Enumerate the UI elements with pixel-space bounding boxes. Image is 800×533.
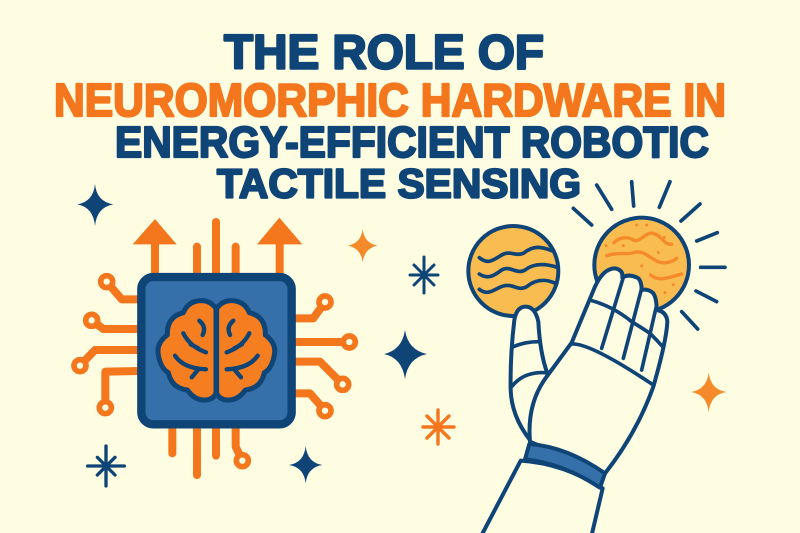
chip illustration xyxy=(74,184,378,486)
left hemisphere xyxy=(158,301,216,400)
upward arrows xyxy=(133,218,302,275)
palm and fingers xyxy=(530,268,667,473)
right hemisphere xyxy=(217,301,275,400)
brain icon xyxy=(158,301,275,400)
title line 4: TACTILE SENSING xyxy=(217,160,581,206)
chip body xyxy=(141,277,292,424)
finger joints xyxy=(572,277,663,385)
thumb joints xyxy=(512,342,545,387)
energy rays xyxy=(573,182,725,329)
title line 1: THE ROLE OF xyxy=(224,26,544,80)
title line 2: NEUROMORPHIC HARDWARE IN xyxy=(54,74,726,126)
wristband xyxy=(525,444,605,488)
robotic hand illustration xyxy=(468,182,726,533)
forearm xyxy=(482,461,603,533)
trace terminals xyxy=(74,276,355,467)
asterisk: navy centre xyxy=(410,257,438,293)
sparkle: orange xyxy=(348,229,378,262)
asterisk: navy bottom left xyxy=(88,446,124,486)
right sensing sphere xyxy=(594,218,689,312)
title xyxy=(54,26,726,206)
sparkle: orange right xyxy=(691,372,726,412)
asterisk: orange centre xyxy=(423,410,454,444)
left sensing sphere xyxy=(468,226,558,316)
sparkle: navy top left xyxy=(77,184,113,226)
title line 3: ENERGY-EFFICIENT ROBOTIC xyxy=(115,118,709,167)
thumb xyxy=(511,307,550,440)
sparkle: navy centre xyxy=(384,330,427,379)
sparkle: navy bottom xyxy=(289,446,322,483)
circuit traces xyxy=(80,222,349,475)
